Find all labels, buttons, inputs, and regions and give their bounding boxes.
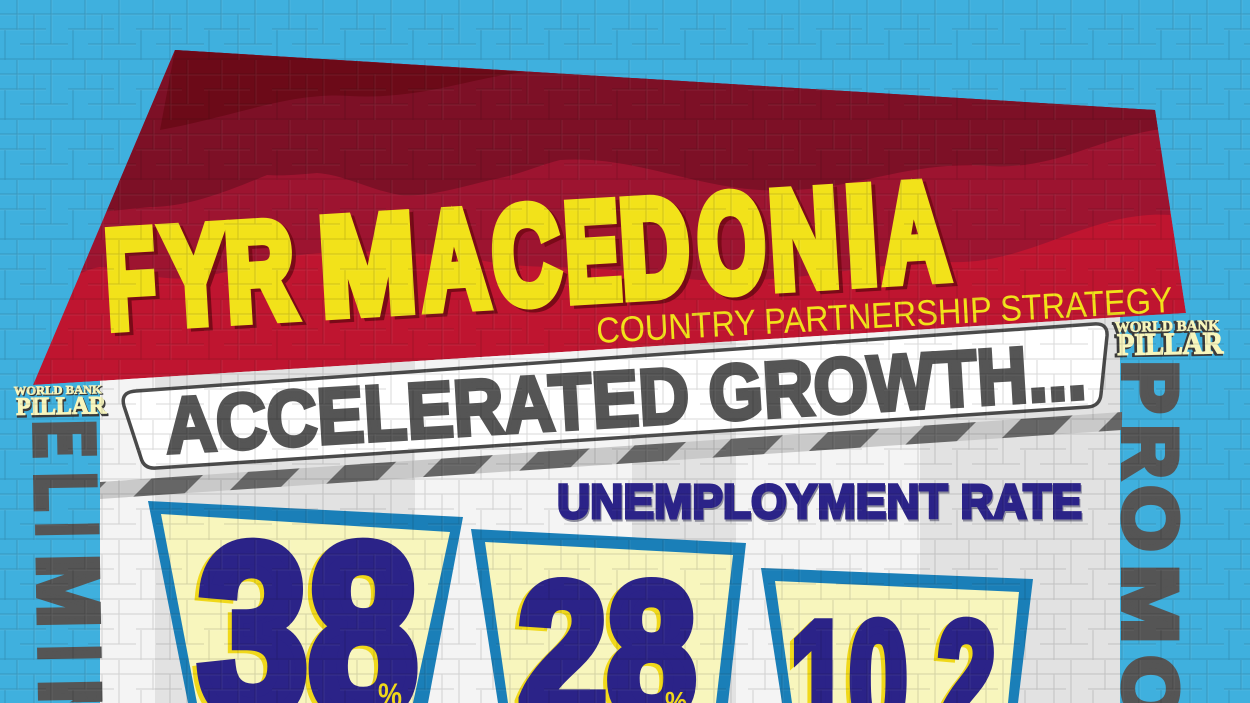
- vertical text: left pillar: L: [17, 472, 113, 511]
- card: 38 percent: [148, 494, 463, 703]
- vertical text: left pillar: [32, 422, 102, 702]
- vertical text: left pillar: E: [16, 420, 112, 458]
- banner: accelerated growth: [123, 324, 1107, 470]
- title: Y: [163, 201, 235, 357]
- panel: building wall: [100, 316, 1120, 703]
- vertical text: left pillar: I: [21, 645, 116, 661]
- panel: roof: [33, 50, 1186, 385]
- label: right world bank pillar: WORLD BANK: [1113, 319, 1218, 337]
- title: E: [561, 174, 624, 330]
- card: 28 percent: [471, 529, 746, 703]
- title: C: [488, 178, 564, 334]
- title: C: [492, 181, 568, 337]
- title: I: [846, 162, 885, 316]
- title: N: [769, 164, 847, 321]
- label: left world bank pillar: PILLAR: [17, 394, 108, 423]
- title: A: [417, 182, 492, 339]
- label: right world bank pillar: WORLD BANK: [1115, 318, 1220, 336]
- vertical text: right pillar: [1120, 363, 1180, 703]
- title: D: [616, 170, 693, 327]
- title: F: [102, 202, 160, 357]
- label: left world bank pillar: PILLAR: [16, 392, 107, 421]
- title: I: [842, 159, 881, 313]
- title: O: [693, 166, 770, 322]
- hazard stripe: [100, 412, 1122, 499]
- title: A: [881, 158, 956, 314]
- title: R: [221, 193, 299, 350]
- label: left world bank pillar: WORLD BANK: [14, 382, 103, 398]
- card: 10.2 percent: [761, 568, 1033, 703]
- number 38: [192, 538, 418, 703]
- label: right world bank pillar: PILLAR: [1115, 326, 1222, 363]
- vertical text: right pillar: R: [1107, 425, 1192, 478]
- title: R: [225, 196, 303, 353]
- number 28: [514, 577, 696, 703]
- label: left world bank pillar: [14, 382, 108, 423]
- title: [102, 155, 956, 360]
- title: M: [319, 189, 423, 348]
- subtitle: COUNTRY PARTNERSHIP STRATEGY: [595, 279, 1174, 351]
- title: A: [421, 185, 496, 342]
- number 10.2: [790, 616, 994, 703]
- vertical text: right pillar: O: [1107, 486, 1192, 551]
- banner text: ACCELERATED GROWTH...: [163, 326, 1088, 470]
- title: E: [565, 177, 628, 333]
- vertical text: left pillar: I: [19, 522, 114, 537]
- title: D: [620, 173, 697, 330]
- title: O: [697, 169, 774, 325]
- label: left world bank pillar: WORLD BANK: [15, 383, 104, 399]
- title: M: [315, 186, 419, 345]
- heading: unemployment rate: UNEMPLOYMENT RATE: [558, 478, 1083, 531]
- vertical text: right pillar: P: [1107, 361, 1192, 413]
- title: F: [106, 205, 164, 360]
- title: Y: [159, 198, 231, 354]
- vertical text: right pillar: M: [1107, 565, 1192, 643]
- vertical text: left pillar: M: [19, 554, 116, 628]
- title: N: [765, 161, 843, 318]
- title: A: [877, 155, 952, 311]
- label: right world bank pillar: PILLAR: [1117, 325, 1224, 362]
- heading: unemployment rate: UNEMPLOYMENT RATE: [557, 476, 1082, 529]
